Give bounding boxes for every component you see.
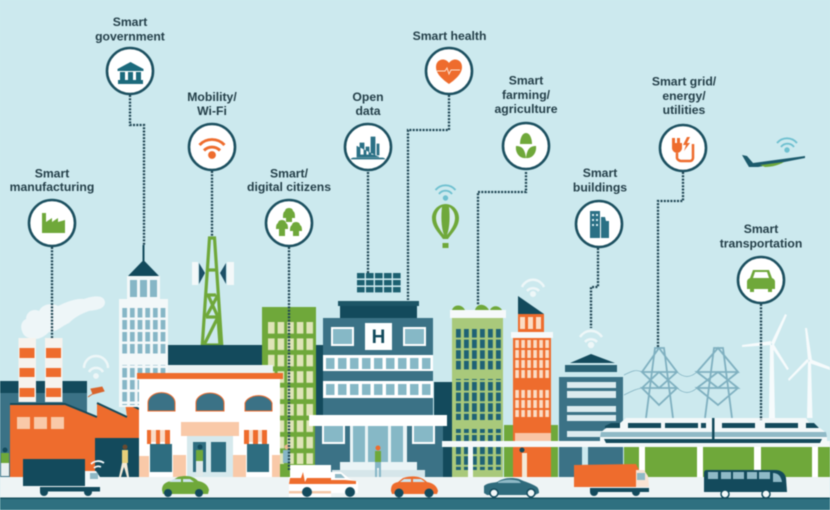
callout: smart government	[95, 15, 165, 94]
hot air balloon	[432, 185, 459, 248]
airplane	[742, 138, 805, 167]
ambulance	[289, 465, 358, 497]
callout: smart grid: energy/	[662, 89, 706, 103]
orange truck	[574, 464, 649, 496]
callout: smart buildings	[573, 166, 627, 247]
panel: hospital	[309, 273, 452, 477]
wifi signal	[777, 138, 797, 152]
callout: smart government: Smart	[113, 15, 147, 29]
callout: smart grid: Smart grid/	[652, 74, 717, 88]
panel: green viaduct	[442, 441, 830, 477]
panel: government tower	[119, 245, 168, 407]
wifi signal	[522, 280, 544, 296]
callout: smart farming: Smart	[509, 74, 543, 88]
callout: digital citizens: Smart/	[270, 166, 309, 180]
dotted connectors	[52, 95, 761, 470]
wifi signal	[84, 356, 108, 378]
factory smoke	[21, 296, 105, 339]
callout: open data: Open	[352, 90, 384, 104]
callout: smart buildings: buildings	[573, 180, 627, 194]
callout: smart grid	[652, 74, 717, 171]
icon: car	[747, 270, 775, 292]
callout: smart manufacturing: manufacturing	[10, 180, 94, 194]
callout: smart farming: farming/	[502, 88, 551, 102]
icon: people network	[276, 208, 302, 236]
callout: digital citizens: digital citizens	[247, 180, 331, 194]
train	[600, 418, 827, 443]
callout: smart health: Smart health	[413, 29, 486, 43]
panel: green roof tower	[450, 305, 558, 477]
icon: corn	[516, 133, 536, 158]
wifi signal	[580, 331, 602, 347]
callout: mobility wifi: Mobility/	[187, 90, 237, 104]
icon: wind turbines	[742, 314, 830, 418]
callout: smart farming: agriculture	[494, 102, 558, 116]
hospital H sign	[365, 323, 392, 350]
icon: bank	[118, 62, 144, 84]
bus	[704, 470, 787, 498]
callout: smart transportation: transportation	[720, 236, 802, 250]
callout: smart transportation	[720, 222, 802, 303]
green car	[162, 476, 209, 497]
icon: heart	[436, 60, 462, 84]
icon: plug and bolt	[672, 137, 693, 161]
orange car	[391, 476, 438, 498]
callout: smart manufacturing: Smart	[35, 166, 69, 180]
panel: shop	[137, 345, 283, 477]
callout: smart grid: utilities	[663, 103, 706, 117]
teal car	[484, 478, 539, 497]
icon: buildings	[590, 211, 609, 238]
callout: open data: data	[355, 104, 381, 118]
callout: digital citizens	[247, 166, 331, 246]
callout: mobility wifi	[187, 90, 237, 170]
callout: open data	[345, 90, 391, 170]
road	[0, 477, 830, 510]
panel: orange tower	[511, 280, 553, 477]
callout: mobility wifi: Wi-Fi	[197, 104, 227, 118]
pedestrians	[1, 444, 527, 477]
callout: smart buildings: Smart	[583, 166, 617, 180]
panel: green building	[262, 307, 316, 477]
callout: smart manufacturing	[10, 166, 94, 246]
dark truck	[23, 459, 104, 496]
security camera	[88, 387, 104, 397]
callout: smart farming	[494, 74, 558, 169]
icon: wifi	[200, 140, 224, 158]
hospital H sign: H	[372, 327, 385, 348]
callout: smart health	[413, 29, 486, 94]
panel: cell antenna	[192, 238, 234, 364]
panel: teal office	[559, 331, 623, 477]
icon: laptop chart	[351, 137, 385, 159]
icon: factory	[42, 213, 65, 233]
icon: power pylons	[624, 348, 738, 418]
callout: smart government: government	[95, 30, 165, 44]
chimneys	[18, 338, 62, 402]
arched windows	[148, 393, 272, 411]
panel: factory	[0, 296, 139, 477]
solar panel	[356, 273, 401, 294]
callout: smart transportation: Smart	[744, 222, 778, 236]
wifi signal	[436, 185, 456, 200]
